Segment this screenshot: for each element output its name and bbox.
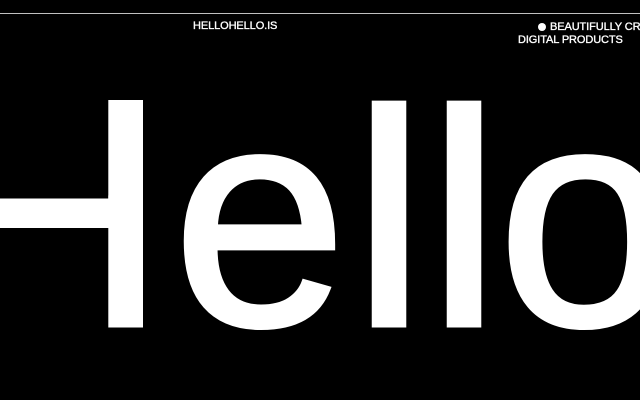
headline: Hello: l: [355, 50, 423, 388]
site name: HELLOHELLO.IS: [193, 20, 277, 32]
tagline: DIGITAL PRODUCTS: [518, 34, 623, 46]
tagline: [518, 21, 640, 46]
headline: Hello: e: [173, 44, 347, 392]
headline: Hello: l: [430, 50, 498, 388]
icon: white dot: [538, 23, 546, 31]
top rule: [0, 13, 640, 14]
